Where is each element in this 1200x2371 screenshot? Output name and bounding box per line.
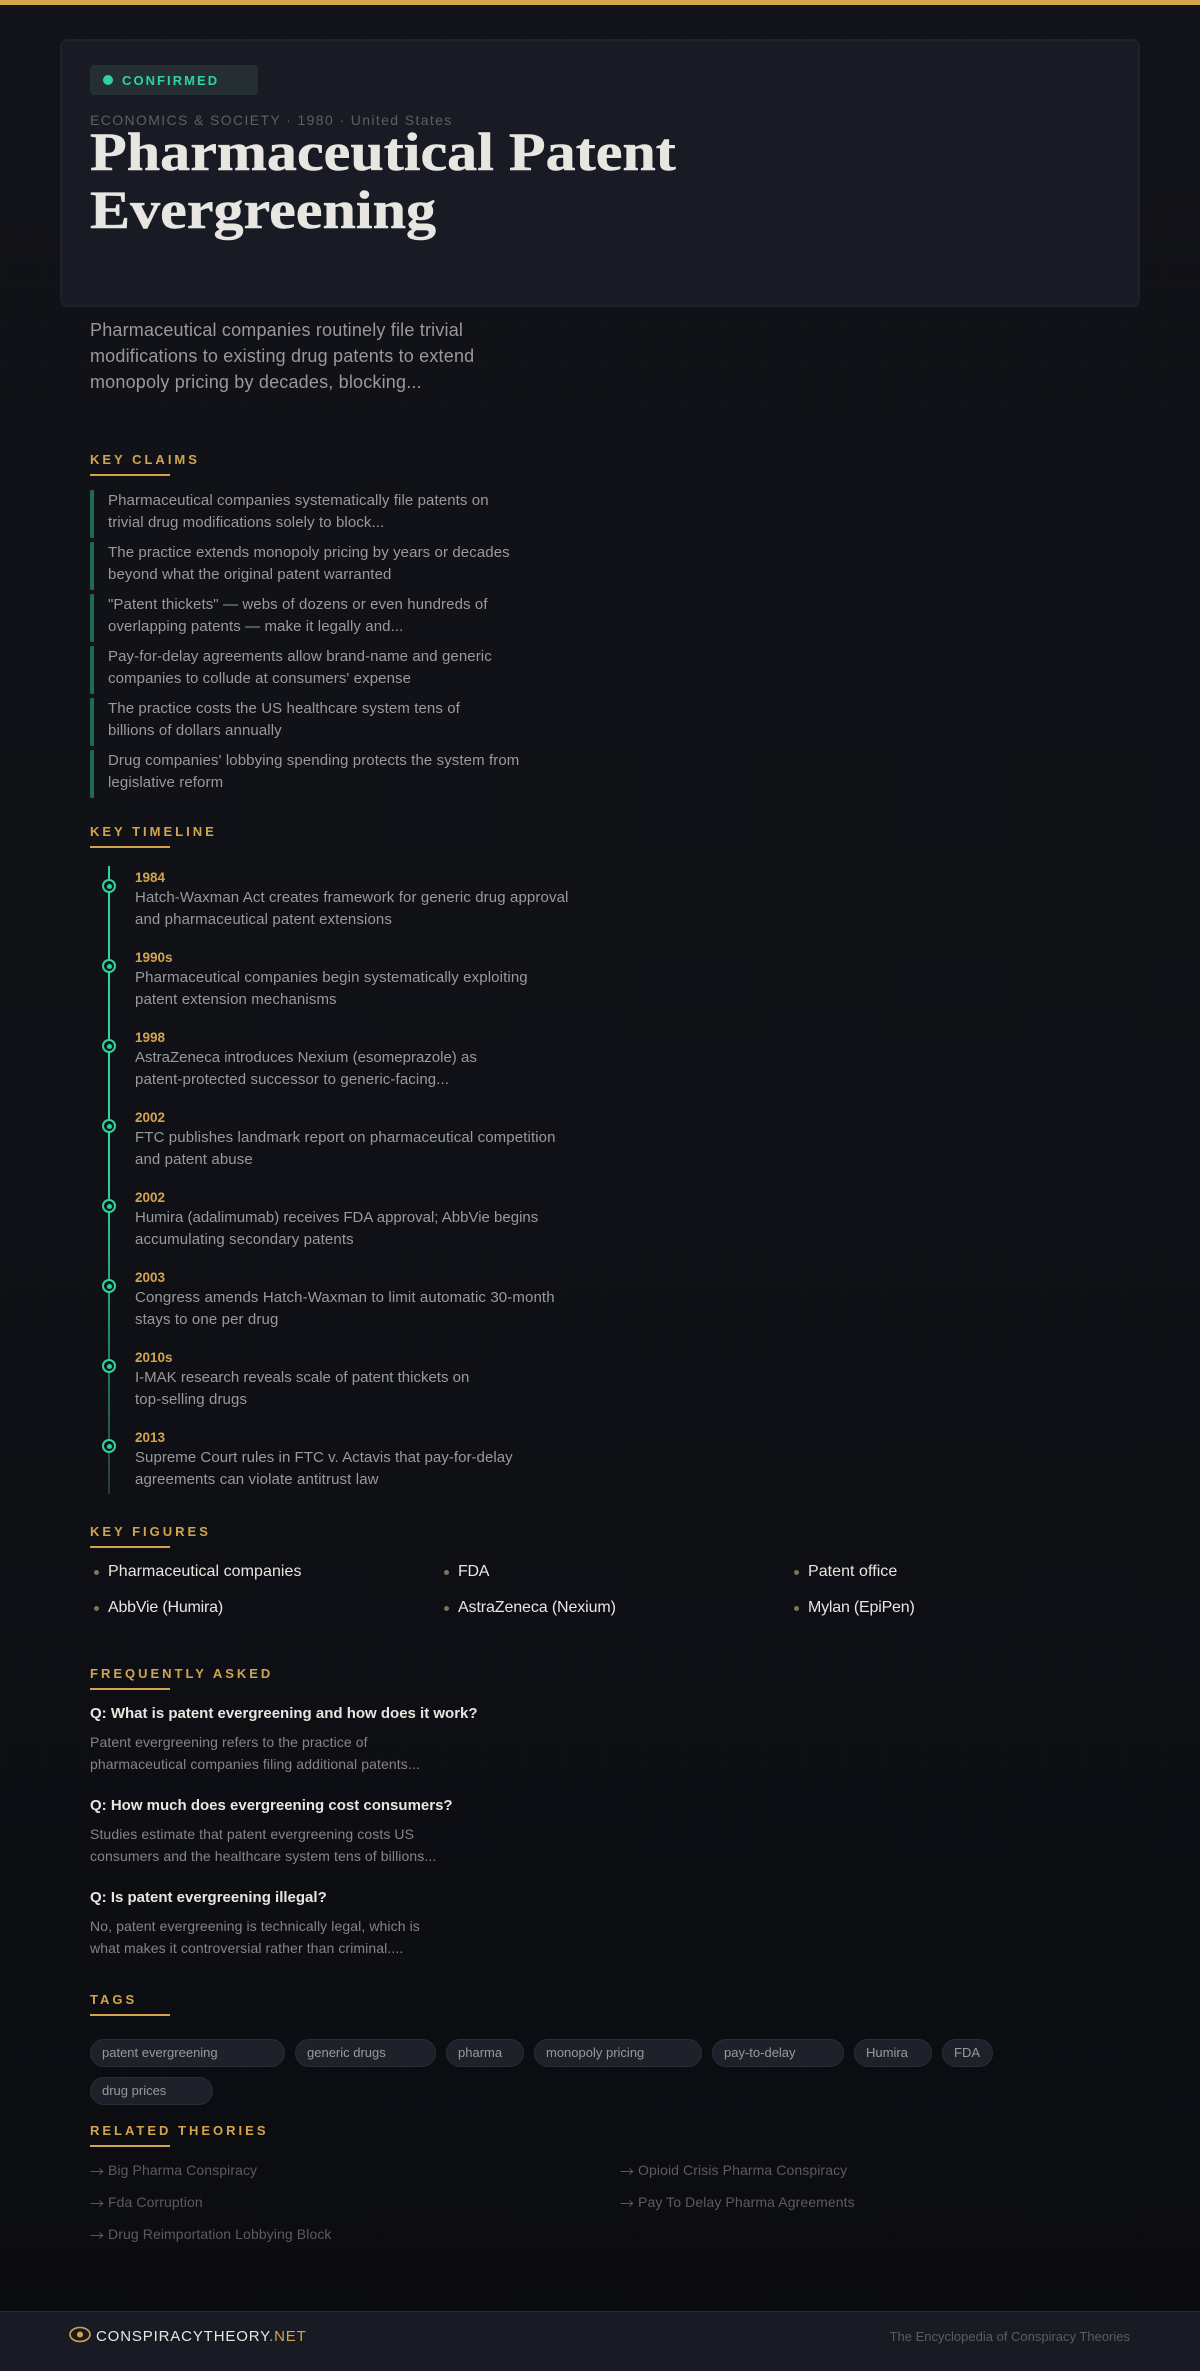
panel: header card [60, 39, 1140, 307]
related link: → [620, 2194, 634, 2214]
panel: key claims [90, 452, 519, 798]
logo wordmark: CONSPIRACYTHEORY.NET [96, 2328, 307, 2345]
figure: AbbVie: AbbVie (Humira) [108, 1598, 223, 1616]
timeline entry 1998: AstraZeneca introduces Nexium (esomeprazole) as [135, 1049, 477, 1066]
timeline entry 1984: Hatch-Waxman Act creates framework for generic drug approval [135, 889, 568, 906]
faq 1: pharmaceutical companies filing additional patents... [90, 1756, 420, 1772]
timeline entry 1984 [102, 870, 568, 928]
badge label: CONFIRMED [122, 73, 219, 88]
panel: frequently asked [90, 1666, 478, 1956]
claim 2 [90, 542, 590, 590]
figure: Pharmaceutical companies: Pharmaceutical companies [108, 1562, 302, 1580]
tag [854, 2039, 932, 2067]
timeline entry 2013: agreements can violate antitrust law [135, 1471, 379, 1488]
heading: frequently asked: FREQUENTLY ASKED [90, 1666, 273, 1681]
faq 3: Q: Is patent evergreening illegal? [90, 1889, 327, 1906]
timeline entry 2003: 2003 [135, 1270, 165, 1285]
heading: related theories: RELATED THEORIES [90, 2123, 268, 2138]
tag [90, 2039, 285, 2067]
timeline entry 2002 Humira: 2002 [135, 1190, 165, 1205]
tag: Humira [866, 2045, 908, 2060]
tag: pharma [458, 2045, 502, 2060]
claim 4: Pay-for-delay agreements allow brand-name and generic [108, 648, 492, 665]
claim 3: "Patent thickets" — webs of dozens or even hundreds of [108, 596, 488, 613]
related link: Drug Reimportation Lobbying Block [108, 2226, 332, 2242]
footer [0, 2311, 1200, 2371]
timeline entry 1998 [102, 1030, 477, 1088]
timeline entry 2013 [102, 1430, 513, 1488]
figure: Mylan: Mylan (EpiPen) [808, 1598, 915, 1616]
faq 2: consumers and the healthcare system tens of billions... [90, 1848, 436, 1864]
top accent bar [0, 0, 1200, 5]
related link: → [90, 2194, 104, 2214]
tag: patent evergreening [102, 2045, 218, 2060]
claim 1: Pharmaceutical companies systematically file patents on [108, 492, 489, 509]
timeline entry 1990s: patent extension mechanisms [135, 991, 337, 1008]
timeline entry 2010s: top-selling drugs [135, 1391, 247, 1408]
timeline entry 1984: 1984 [135, 870, 165, 885]
timeline entry 1990s: 1990s [135, 950, 173, 965]
timeline entry 2010s [102, 1350, 469, 1408]
claim 6: legislative reform [108, 774, 223, 791]
panel: tags [90, 1992, 993, 2105]
related link: → [620, 2162, 634, 2182]
title: Pharmaceutical Patent [90, 122, 676, 182]
timeline entry 1998: patent-protected successor to generic-facing... [135, 1071, 449, 1088]
summary text: Pharmaceutical companies routinely file trivial [90, 320, 463, 340]
timeline entry 2013: 2013 [135, 1430, 165, 1445]
timeline entry 1990s [102, 950, 528, 1008]
claim 3: overlapping patents — make it legally and... [108, 618, 403, 635]
category meta line: ECONOMICS & SOCIETY · 1980 · United States [90, 112, 453, 128]
faq 3: what makes it controversial rather than criminal.... [90, 1940, 403, 1956]
panel: key figures [90, 1524, 915, 1616]
heading: tags: TAGS [90, 1992, 137, 2007]
timeline entry 2010s: 2010s [135, 1350, 173, 1365]
tag: monopoly pricing [546, 2045, 644, 2060]
faq 1: Q: What is patent evergreening and how does it work? [90, 1704, 478, 1722]
tag: generic drugs [307, 2045, 386, 2060]
timeline entry 2003 [102, 1270, 555, 1328]
claim 1: trivial drug modifications solely to block... [108, 514, 384, 531]
claim 5: billions of dollars annually [108, 722, 282, 739]
icon: eye logo [69, 2326, 91, 2342]
timeline entry 2002 FTC: FTC publishes landmark report on pharmaceutical competition [135, 1129, 556, 1146]
timeline entry 1998: 1998 [135, 1030, 165, 1045]
tag [942, 2039, 993, 2067]
tag [446, 2039, 524, 2067]
timeline entry 2002 Humira: accumulating secondary patents [135, 1231, 354, 1248]
related link: → [90, 2162, 104, 2182]
panel: key timeline [90, 824, 568, 1494]
related link: Fda Corruption [108, 2194, 203, 2210]
summary text [90, 320, 474, 392]
tag [90, 2077, 213, 2105]
title [90, 122, 676, 240]
related link [90, 2194, 203, 2214]
tag: drug prices [102, 2083, 166, 2098]
icon: status dot [103, 75, 113, 85]
panel: related theories [90, 2123, 855, 2246]
timeline entry 2002 Humira: Humira (adalimumab) receives FDA approval; AbbVie begins [135, 1209, 538, 1226]
summary text: monopoly pricing by decades, blocking... [90, 372, 422, 392]
timeline entry 2002 FTC: 2002 [135, 1110, 165, 1125]
claim 4 [90, 646, 590, 694]
timeline entry 2002 FTC [102, 1110, 556, 1168]
claim 4: companies to collude at consumers' expense [108, 670, 411, 687]
timeline entry 1984: and pharmaceutical patent extensions [135, 911, 392, 928]
claim 6: Drug companies' lobbying spending protects the system from [108, 752, 519, 769]
related link: → [90, 2226, 104, 2246]
claim 6 [90, 750, 590, 798]
timeline entry 2013: Supreme Court rules in FTC v. Actavis that pay-for-delay [135, 1449, 513, 1466]
tag [295, 2039, 436, 2067]
status badge: confirmed [90, 65, 258, 95]
faq 3 [90, 1889, 420, 1956]
timeline entry 2010s: I-MAK research reveals scale of patent thickets on [135, 1369, 469, 1386]
claim 3 [90, 594, 590, 642]
timeline entry 2002 Humira [102, 1190, 538, 1248]
timeline vertical line [108, 866, 110, 1494]
faq 2: Q: How much does evergreening cost consumers? [90, 1797, 453, 1814]
claim 5 [90, 698, 590, 746]
title: Evergreening [90, 180, 436, 240]
footer tagline: The Encyclopedia of Conspiracy Theories [890, 2329, 1130, 2344]
figure: Patent office: Patent office [808, 1562, 897, 1580]
timeline entry 2003: Congress amends Hatch-Waxman to limit automatic 30-month [135, 1289, 555, 1306]
faq 1 [90, 1704, 478, 1772]
tag: pay-to-delay [724, 2045, 796, 2060]
claim 5: The practice costs the US healthcare system tens of [108, 700, 460, 717]
faq 2: Studies estimate that patent evergreening costs US [90, 1826, 414, 1842]
timeline entry 1990s: Pharmaceutical companies begin systematically exploiting [135, 969, 528, 986]
timeline entry 2002 FTC: and patent abuse [135, 1151, 253, 1168]
tag [534, 2039, 702, 2067]
claim 2: The practice extends monopoly pricing by years or decades [108, 544, 510, 561]
heading: key figures: KEY FIGURES [90, 1524, 211, 1539]
related link: Big Pharma Conspiracy [108, 2162, 257, 2178]
tag: FDA [954, 2045, 980, 2060]
summary text: modifications to existing drug patents to extend [90, 346, 474, 366]
timeline entry 2003: stays to one per drug [135, 1311, 278, 1328]
related link: Pay To Delay Pharma Agreements [638, 2194, 855, 2210]
heading: key claims: KEY CLAIMS [90, 452, 200, 467]
faq 2 [90, 1797, 453, 1864]
faq 3: No, patent evergreening is technically legal, which is [90, 1918, 420, 1934]
tag [712, 2039, 844, 2067]
figure: AstraZeneca: AstraZeneca (Nexium) [458, 1598, 616, 1616]
claim 2: beyond what the original patent warranted [108, 566, 391, 583]
related link: Opioid Crisis Pharma Conspiracy [638, 2162, 847, 2178]
figure: FDA: FDA [458, 1562, 489, 1580]
claim 1 [90, 490, 590, 538]
heading: key timeline: KEY TIMELINE [90, 824, 217, 839]
faq 1: Patent evergreening refers to the practice of [90, 1734, 368, 1750]
figure: FDA [444, 1562, 490, 1580]
